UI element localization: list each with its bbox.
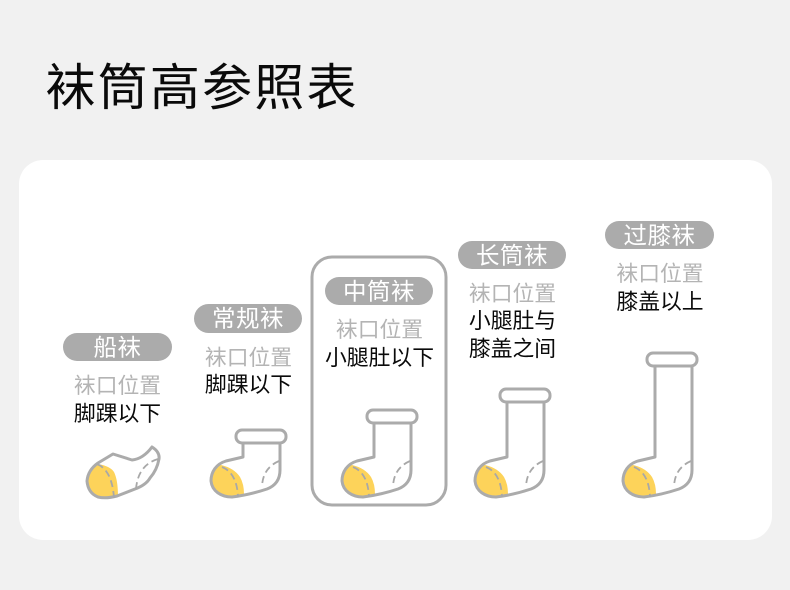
- column: no-show socks: 脚踝以下: [74, 401, 161, 426]
- column: over-knee socks: 膝盖以上: [616, 289, 704, 314]
- column: long socks: 袜口位置: [469, 281, 556, 306]
- column: long socks: 长筒袜: [476, 242, 548, 268]
- column: over-knee socks: 袜口位置: [616, 261, 704, 286]
- column: no-show socks: [63, 333, 172, 498]
- column: over-knee socks: 过膝袜: [624, 222, 696, 248]
- title: 袜筒高参照表: [46, 60, 359, 116]
- column: mid-calf socks: [325, 277, 434, 497]
- column: no-show socks: 袜口位置: [74, 373, 161, 398]
- column: over-knee socks: [605, 221, 714, 497]
- column: regular socks: [194, 304, 302, 497]
- panel: sock height chart: [19, 160, 772, 540]
- column: mid-calf socks: 袜口位置: [336, 317, 423, 342]
- column: no-show socks: 船袜: [94, 334, 142, 360]
- column: mid-calf socks: 小腿肚以下: [325, 345, 434, 370]
- column: mid-calf socks: 中筒袜: [343, 278, 415, 304]
- highlight frame: mid-calf socks: [312, 257, 446, 505]
- column: regular socks: 常规袜: [212, 306, 284, 332]
- column: regular socks: 脚踝以下: [205, 372, 292, 397]
- column: regular socks: 袜口位置: [205, 345, 292, 370]
- column: long socks: 小腿肚与: [469, 308, 556, 333]
- column: long socks: 膝盖之间: [469, 336, 556, 361]
- column: long socks: [458, 241, 566, 497]
